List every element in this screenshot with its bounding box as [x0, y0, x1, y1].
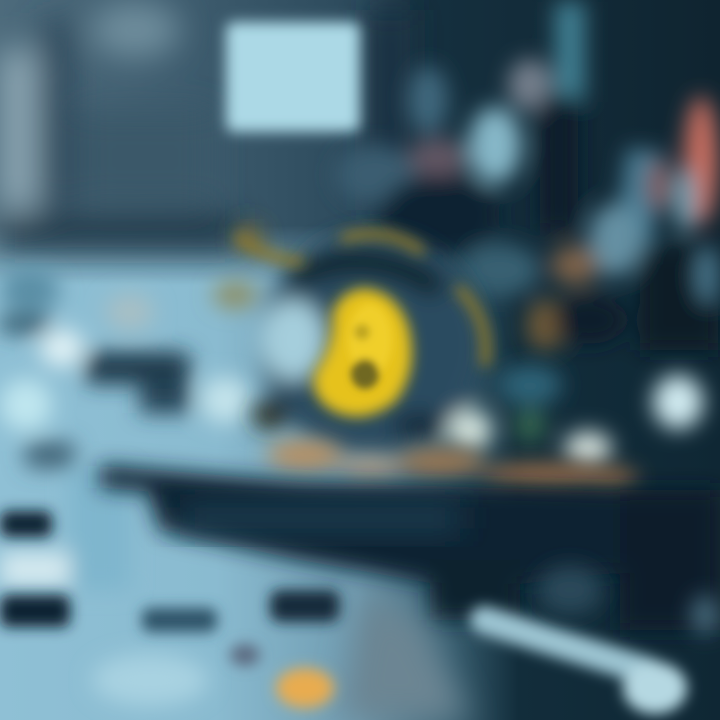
dark keyboard band [100, 465, 720, 630]
chart shapes, top right [335, 2, 719, 351]
orange coins row on the ledge [267, 440, 638, 488]
lower right pale bar [484, 566, 719, 714]
left top soft panels [0, 2, 410, 248]
lower centre haze and orange coin [230, 590, 470, 720]
icon: gold coin [314, 288, 412, 417]
lower left light blocks and dark dashes [0, 268, 340, 706]
pale square panel [226, 22, 360, 132]
background: pale lower area fading into dark upper area [0, 230, 509, 720]
golden ring arcs [240, 234, 486, 362]
central dark disc with golden ring [213, 224, 703, 465]
